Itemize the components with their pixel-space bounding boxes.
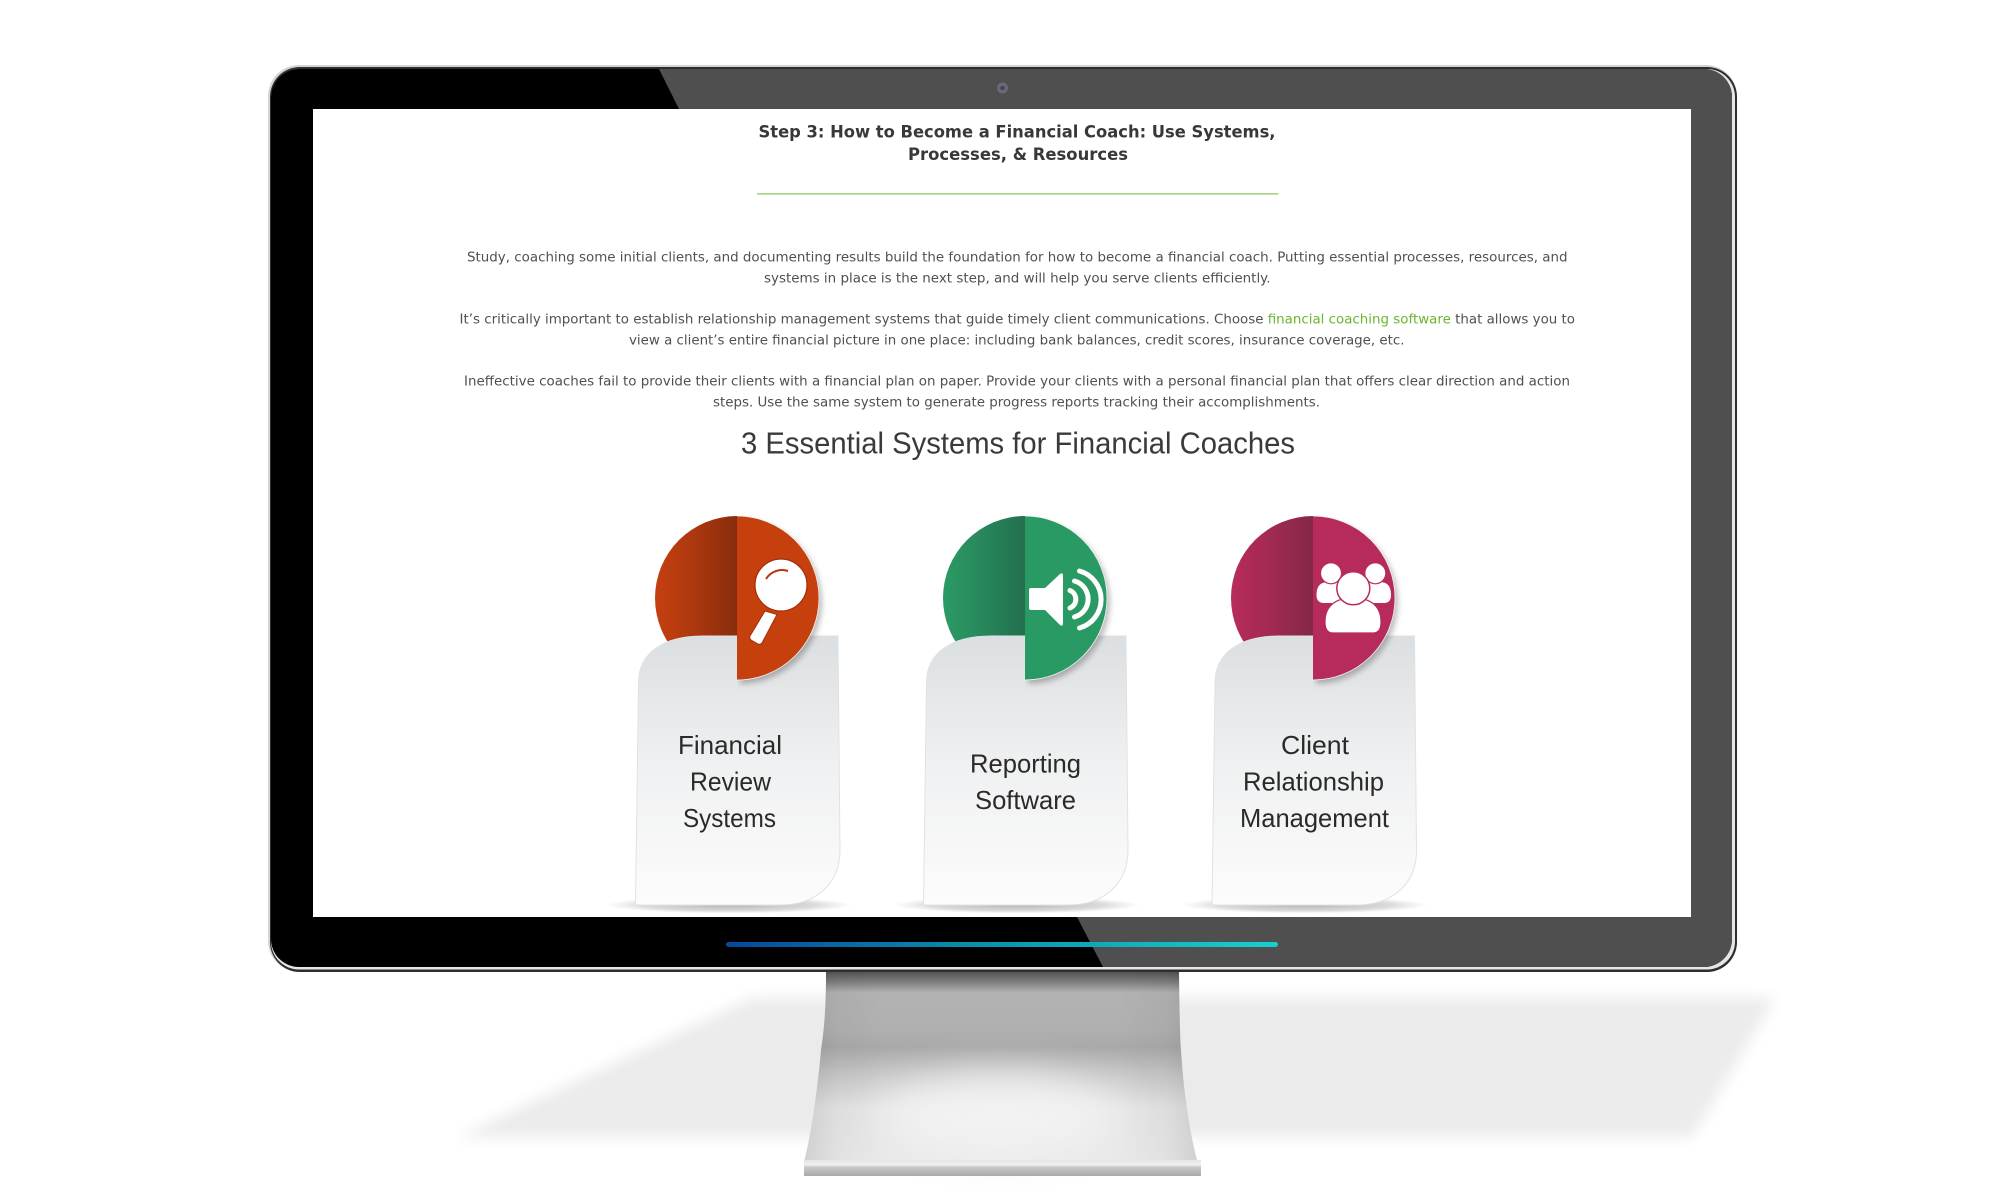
circle front half (1313, 516, 1395, 680)
label: Reporting (970, 748, 1081, 778)
monitor stand (804, 972, 1201, 1176)
paragraph 3 (464, 374, 1570, 410)
card (1212, 636, 1416, 905)
light bar (726, 942, 1278, 947)
card (636, 636, 840, 905)
title divider (757, 193, 1278, 194)
card (924, 636, 1128, 905)
circle back half (655, 516, 737, 680)
webcam (997, 82, 1008, 94)
label (970, 748, 1081, 815)
label: Financial (678, 730, 782, 760)
card shadow (1181, 896, 1429, 914)
circle back half (943, 516, 1025, 680)
frame glare (659, 69, 1732, 967)
paragraph 1: Study, coaching some initial clients, and documenting results build the foundation for how to become a financial coach. Putting essential processes, resources, and (467, 250, 1568, 266)
panel: client relationship management (1181, 516, 1429, 914)
section heading: 3 Essential Systems for Financial Coaches (741, 426, 1295, 460)
label: Systems (683, 803, 776, 833)
label (1240, 730, 1390, 833)
title: Processes, & Resources (908, 145, 1128, 165)
monitor frame (268, 65, 1737, 972)
paragraph 2: view a client’s entire financial picture in one place: including bank balances, credit scores, insurance coverage, etc. (629, 334, 1404, 348)
paragraph 3: Ineffective coaches fail to provide their clients with a financial plan on paper. Provide your clients with a personal financial plan that offers clear direction and action (464, 374, 1570, 390)
card shadow (893, 896, 1141, 914)
paragraph 2 (460, 312, 1575, 348)
icon: speaker (1029, 571, 1101, 628)
paragraph 1 (467, 250, 1568, 286)
panel: reporting software (893, 516, 1141, 914)
floor shadow (458, 998, 1775, 1137)
label: Software (975, 785, 1076, 815)
label: Management (1240, 803, 1390, 833)
circle back half (1231, 516, 1313, 680)
panel: financial review systems (605, 516, 853, 914)
circle front half (737, 516, 819, 680)
screen (313, 109, 1691, 917)
paragraph 3: steps. Use the same system to generate progress reports tracking their accomplishments. (713, 396, 1320, 410)
paragraph 2: It’s critically important to establish relationship management systems that guide timely client communications. Choose financial coaching software that allows you to (460, 312, 1575, 328)
circle front half (1025, 516, 1107, 680)
title (758, 122, 1276, 165)
icon: people (1316, 563, 1391, 633)
title: Step 3: How to Become a Financial Coach: Use Systems, (758, 122, 1276, 142)
label (678, 730, 782, 833)
label: Review (690, 766, 771, 796)
card shadow (605, 896, 853, 914)
icon: magnifier (750, 559, 807, 644)
label: Client (1281, 730, 1350, 760)
label: Relationship (1243, 766, 1384, 796)
paragraph 1: systems in place is the next step, and will help you serve clients efficiently. (764, 272, 1270, 286)
